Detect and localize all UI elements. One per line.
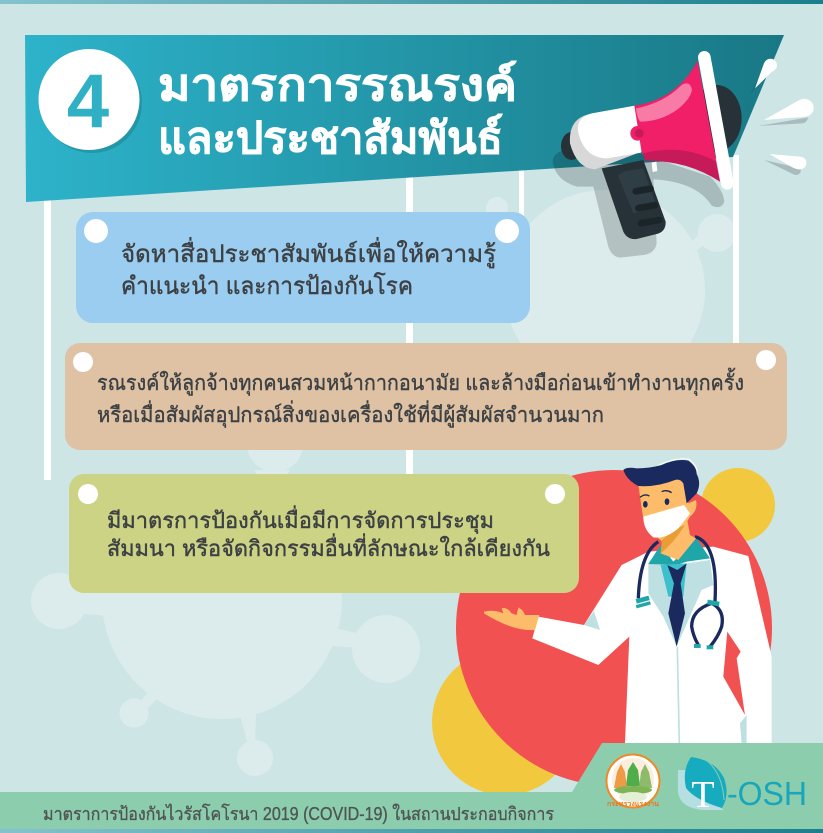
panel: blue: คำแนะนำ และการป้องกันโรค (121, 272, 413, 300)
shirt (648, 538, 710, 565)
red circle (456, 470, 772, 786)
hand (484, 607, 539, 630)
virus background upper (486, 190, 736, 390)
logo: T-OSH (678, 756, 807, 816)
panel: green (69, 474, 579, 593)
mask (643, 505, 690, 538)
megaphone shadow (553, 150, 724, 258)
lapels (648, 547, 677, 647)
white vertical strips (44, 155, 739, 480)
doctor body (484, 537, 772, 743)
rim (704, 57, 727, 183)
yellow circle bottom (432, 649, 578, 795)
body (570, 106, 642, 169)
footer text: มาตราการป้องกันไวรัสโคโรนา 2019 (COVID-19) ในสถานประกอบกิจการ (43, 803, 554, 824)
panel: green: มีมาตรการป้องกันเมื่อมีการจัดการประชุม (107, 505, 494, 534)
bottom bar (0, 829, 823, 833)
header banner (25, 35, 784, 202)
tie (667, 563, 687, 647)
number badge: 4 (67, 59, 109, 144)
handle (602, 160, 666, 239)
doctor illustration (484, 459, 772, 743)
coat (532, 547, 772, 743)
top bar (0, 0, 823, 4)
logo: ministry seal (606, 754, 660, 808)
stethoscope (638, 537, 722, 647)
panel: green: สัมมนา หรือจัดกิจกรรมอื่นที่ลักษณะใกล้เคียงกัน (107, 533, 550, 561)
doctor head (623, 459, 699, 560)
logo: T-OSH: -OSH (727, 775, 807, 812)
heading: มาตรการรณรงค์ (158, 60, 517, 110)
panel: blue (76, 212, 530, 323)
heading: และประชาสัมพันธ์ (158, 113, 503, 163)
bell (634, 61, 720, 182)
hair (623, 460, 699, 503)
panel: tan (65, 343, 787, 450)
logo: T-OSH: T (691, 774, 715, 816)
number badge (38, 49, 142, 153)
icon: megaphone (553, 57, 814, 258)
sound lines (749, 68, 770, 95)
yellow circle top (701, 468, 775, 542)
logo: ministry seal: กระทรวงแรงงาน (607, 801, 659, 808)
panel: tan: รณรงค์ให้ลูกจ้างทุกคนสวมหน้ากากอนามัย และล้างมือก่อนเข้าทำงานทุกครั้ง (97, 368, 744, 396)
virus background lower (31, 416, 420, 776)
face (638, 475, 696, 537)
eyes (643, 498, 669, 508)
neck (653, 517, 696, 560)
panel: tan: หรือเมื่อสัมผัสอุปกรณ์สิ่งของเครื่องใช้ที่มีผู้สัมผัสจำนวนมาก (97, 400, 604, 428)
panel: blue: จัดหาสื่อประชาสัมพันธ์เพื่อให้ความรู้ (121, 237, 496, 269)
heading (158, 60, 517, 163)
footer band (0, 743, 823, 829)
